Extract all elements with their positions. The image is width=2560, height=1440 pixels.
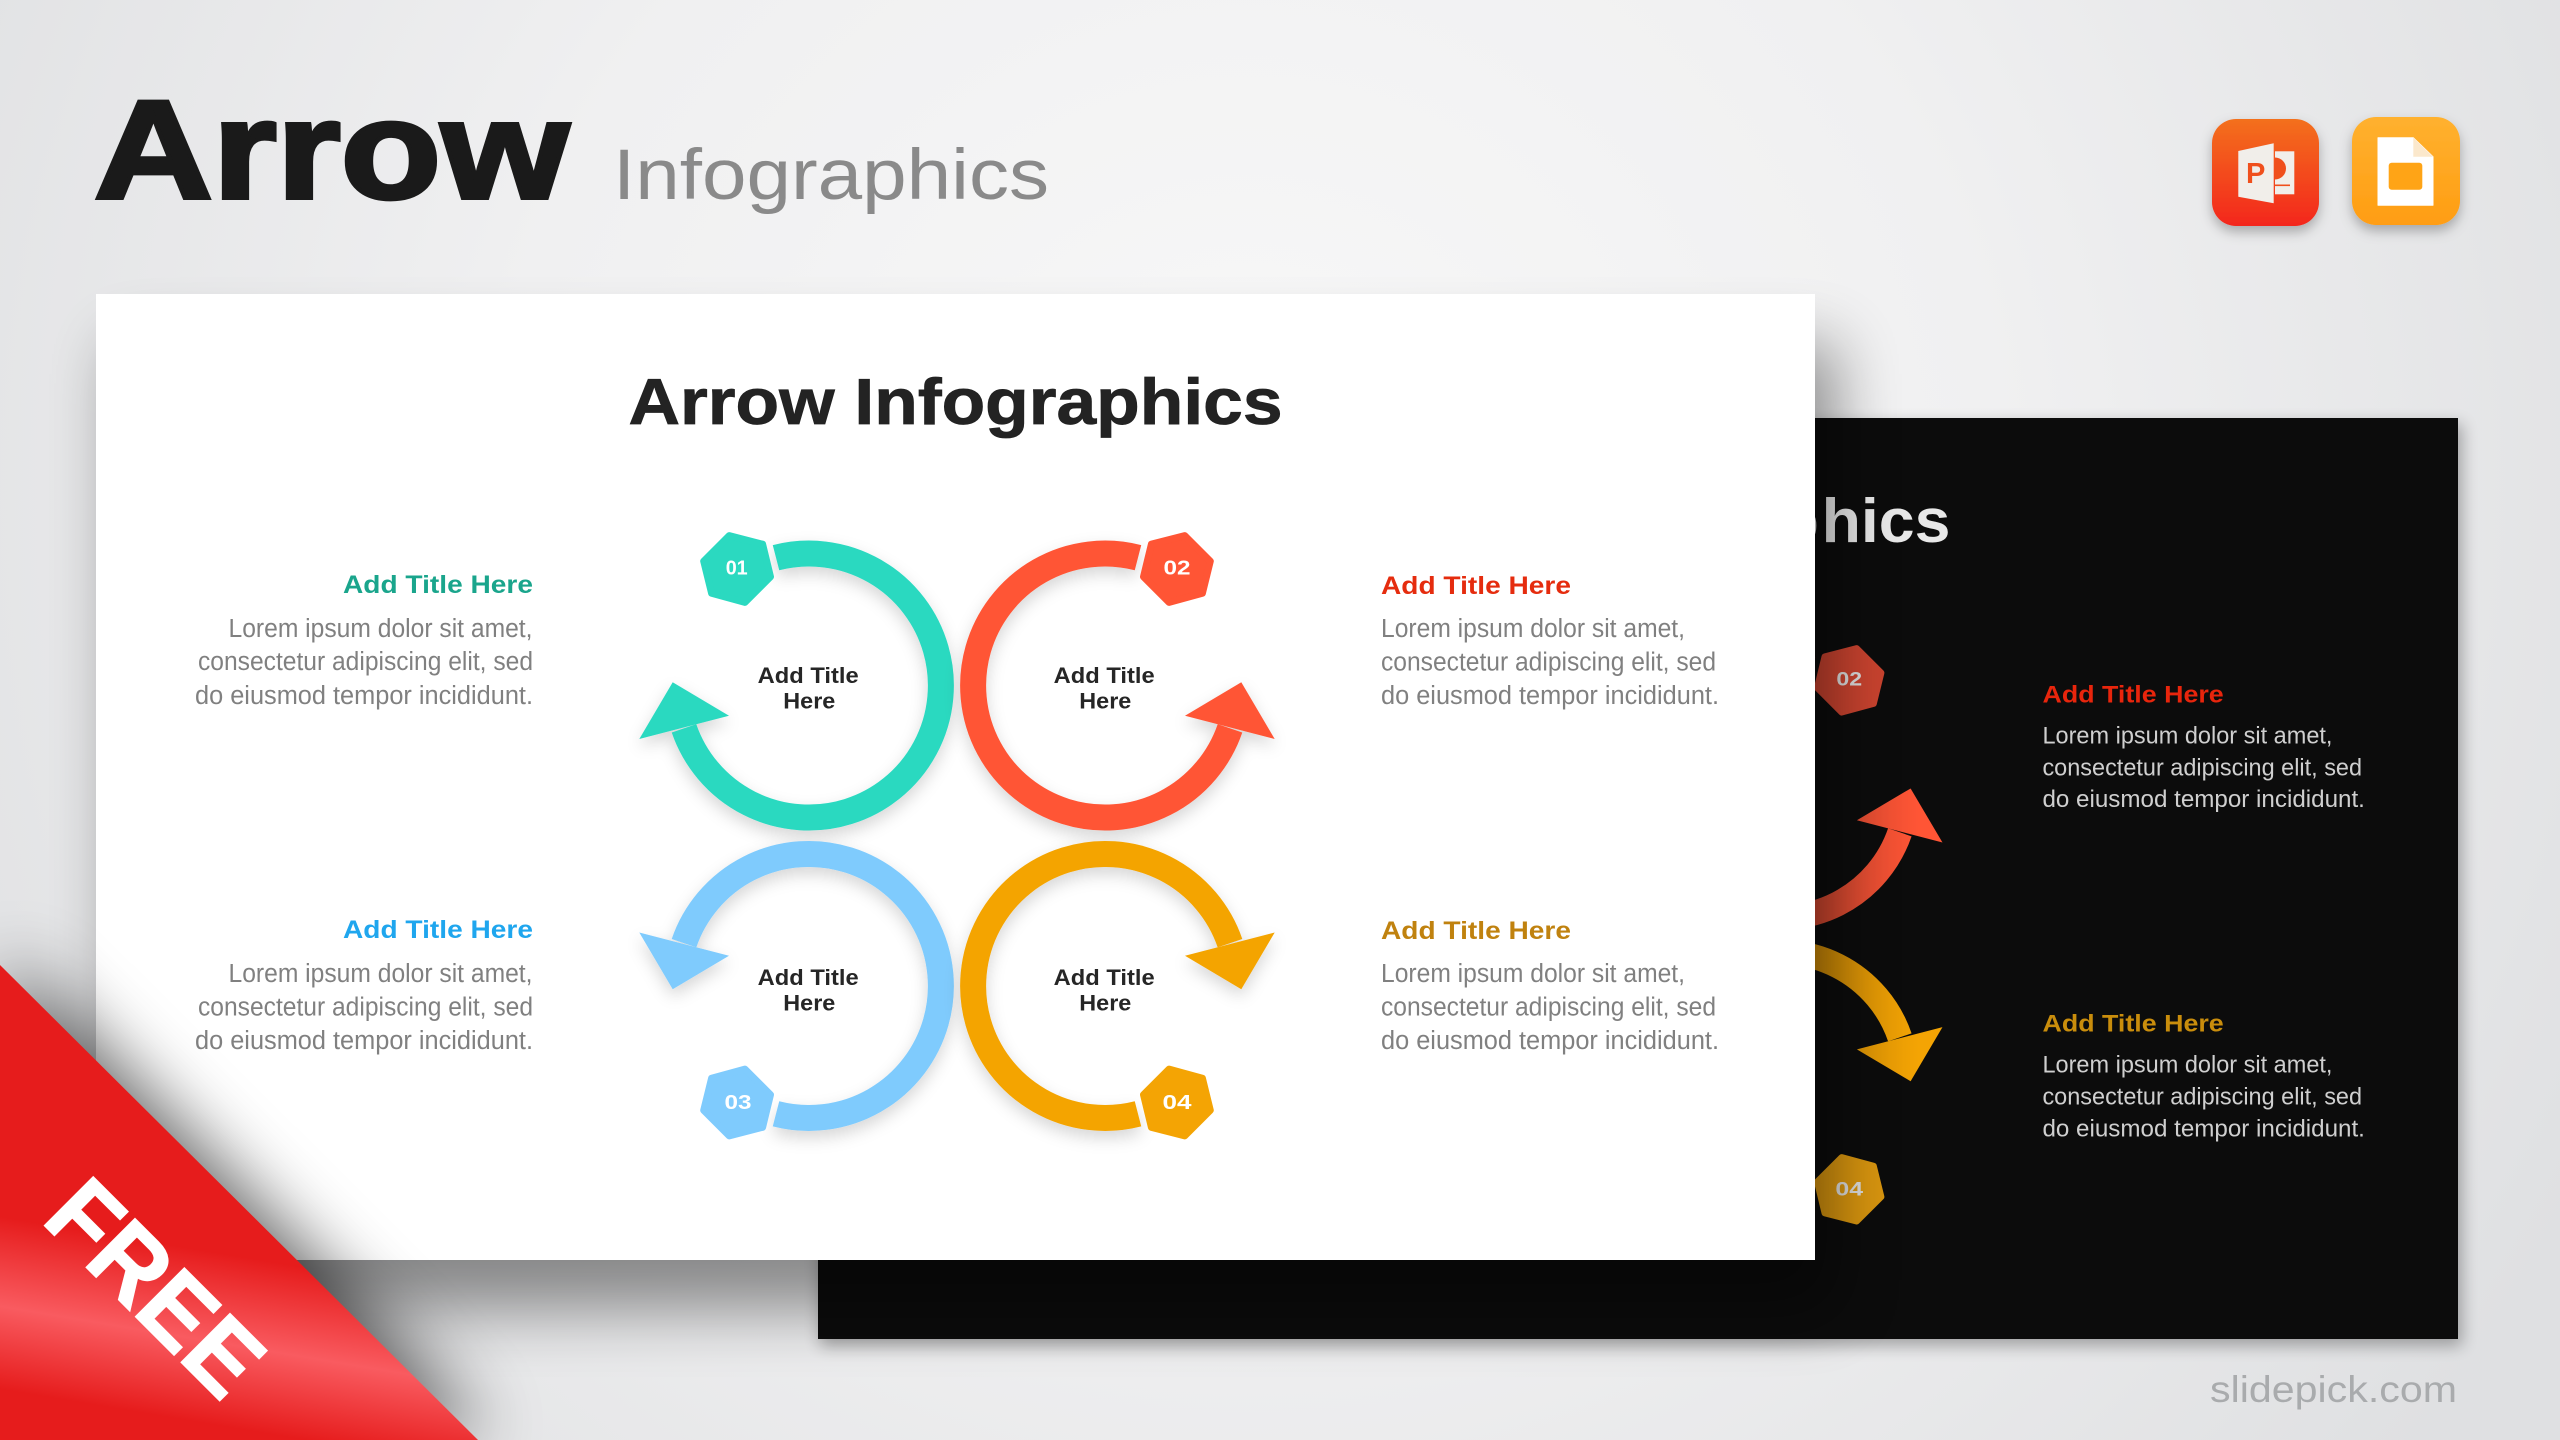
watermark: slidepick.com — [2210, 1368, 2457, 1410]
icon: Google Slides — [2352, 117, 2460, 225]
main title: Arrow — [94, 71, 570, 228]
dark slide step 02 arrow: 02 — [1836, 670, 1862, 691]
circular arrow 01 teal — [639, 536, 941, 818]
text block: step 02: do eiusmod tempor incididunt. — [1381, 682, 1719, 710]
circular arrow 02 red: 02 — [1164, 558, 1190, 580]
text block: step 01: Add Title Here — [343, 571, 533, 599]
circular arrow 04 orange: 04 — [1162, 1092, 1193, 1114]
text block: step 03: consectetur adipiscing elit, sed — [198, 994, 533, 1022]
text block: step 01: do eiusmod tempor incididunt. — [195, 682, 533, 710]
dark slide step 04 arrow: 04 — [1835, 1180, 1864, 1201]
dark slide text block 04: Add Title Here — [2042, 1010, 2224, 1037]
dark slide step 02 arrow — [1655, 648, 1942, 917]
dark slide text block 04: consectetur adipiscing elit, sed — [2042, 1083, 2362, 1110]
dark slide title: hics — [1822, 487, 1950, 556]
circular arrow 02 red — [973, 536, 1275, 818]
circular arrow 01 teal: 01 — [726, 558, 748, 580]
text block: step 04 — [1381, 917, 1719, 1055]
circular arrow 03 blue: Add Title — [758, 965, 859, 990]
circular arrow 04 orange: Add Title — [1054, 965, 1155, 990]
circular arrow 04 orange — [973, 854, 1275, 1136]
subtitle: Infographics — [613, 136, 1049, 215]
icon: PowerPoint: P — [2246, 158, 2265, 190]
text block: step 03: Lorem ipsum dolor sit amet, — [228, 960, 532, 988]
circular arrow 03 blue: 03 — [724, 1092, 752, 1114]
circular arrow 03 blue: Here — [783, 990, 835, 1016]
ribbon: FREE — [0, 965, 478, 1440]
panel: dark slide behind — [818, 418, 2462, 1346]
dark slide text block 04 — [2042, 1010, 2365, 1142]
text block: step 01: consectetur adipiscing elit, sed — [198, 648, 533, 676]
text block: step 02: consectetur adipiscing elit, sed — [1381, 648, 1716, 676]
dark slide text block 02: Lorem ipsum dolor sit amet, — [2042, 722, 2332, 749]
dark slide text block 04: Lorem ipsum dolor sit amet, — [2042, 1051, 2332, 1078]
circular arrow 01 teal: Here — [783, 688, 835, 714]
main title — [94, 71, 1049, 228]
text block: step 02: Add Title Here — [1381, 572, 1571, 600]
panel: white slide — [96, 294, 1815, 1260]
dark slide text block 02 — [2042, 681, 2365, 813]
circular arrow 03 blue — [639, 854, 941, 1136]
text block: step 04: Add Title Here — [1381, 917, 1571, 945]
dark slide step 02 arrow: Here — [1756, 795, 1806, 818]
dark slide text block 04: do eiusmod tempor incididunt. — [2042, 1115, 2365, 1142]
circular arrow 02 red: Add Title — [1054, 663, 1155, 688]
dark slide step 04 arrow: Here — [1756, 1084, 1806, 1107]
dark slide title: Arrow Infograp — [1326, 487, 1819, 556]
icon: PowerPoint — [2212, 119, 2319, 226]
circular arrow 02 red: Here — [1079, 688, 1131, 714]
text block: step 01 — [195, 571, 533, 710]
circular arrow 01 teal: Add Title — [758, 663, 859, 688]
text block: step 04: consectetur adipiscing elit, sed — [1381, 994, 1716, 1022]
text block: step 03 — [195, 916, 533, 1055]
text block: step 03: Add Title Here — [343, 916, 533, 944]
dark slide step 04 arrow — [1655, 952, 1942, 1221]
ribbon: FREE: FREE — [24, 1157, 286, 1419]
circular arrow 04 orange: Here — [1079, 990, 1131, 1016]
dark slide text block 02: do eiusmod tempor incididunt. — [2042, 786, 2365, 813]
text block: step 02 — [1381, 572, 1719, 710]
text block: step 04: Lorem ipsum dolor sit amet, — [1381, 960, 1685, 988]
text block: step 02: Lorem ipsum dolor sit amet, — [1381, 615, 1685, 643]
text block: step 04: do eiusmod tempor incididunt. — [1381, 1027, 1719, 1055]
dark slide text block 02: consectetur adipiscing elit, sed — [2042, 754, 2362, 781]
text block: step 03: do eiusmod tempor incididunt. — [195, 1027, 533, 1055]
text block: step 01: Lorem ipsum dolor sit amet, — [228, 615, 532, 643]
dark slide text block 02: Add Title Here — [2042, 681, 2224, 708]
slide title: Arrow Infographics — [628, 365, 1282, 438]
